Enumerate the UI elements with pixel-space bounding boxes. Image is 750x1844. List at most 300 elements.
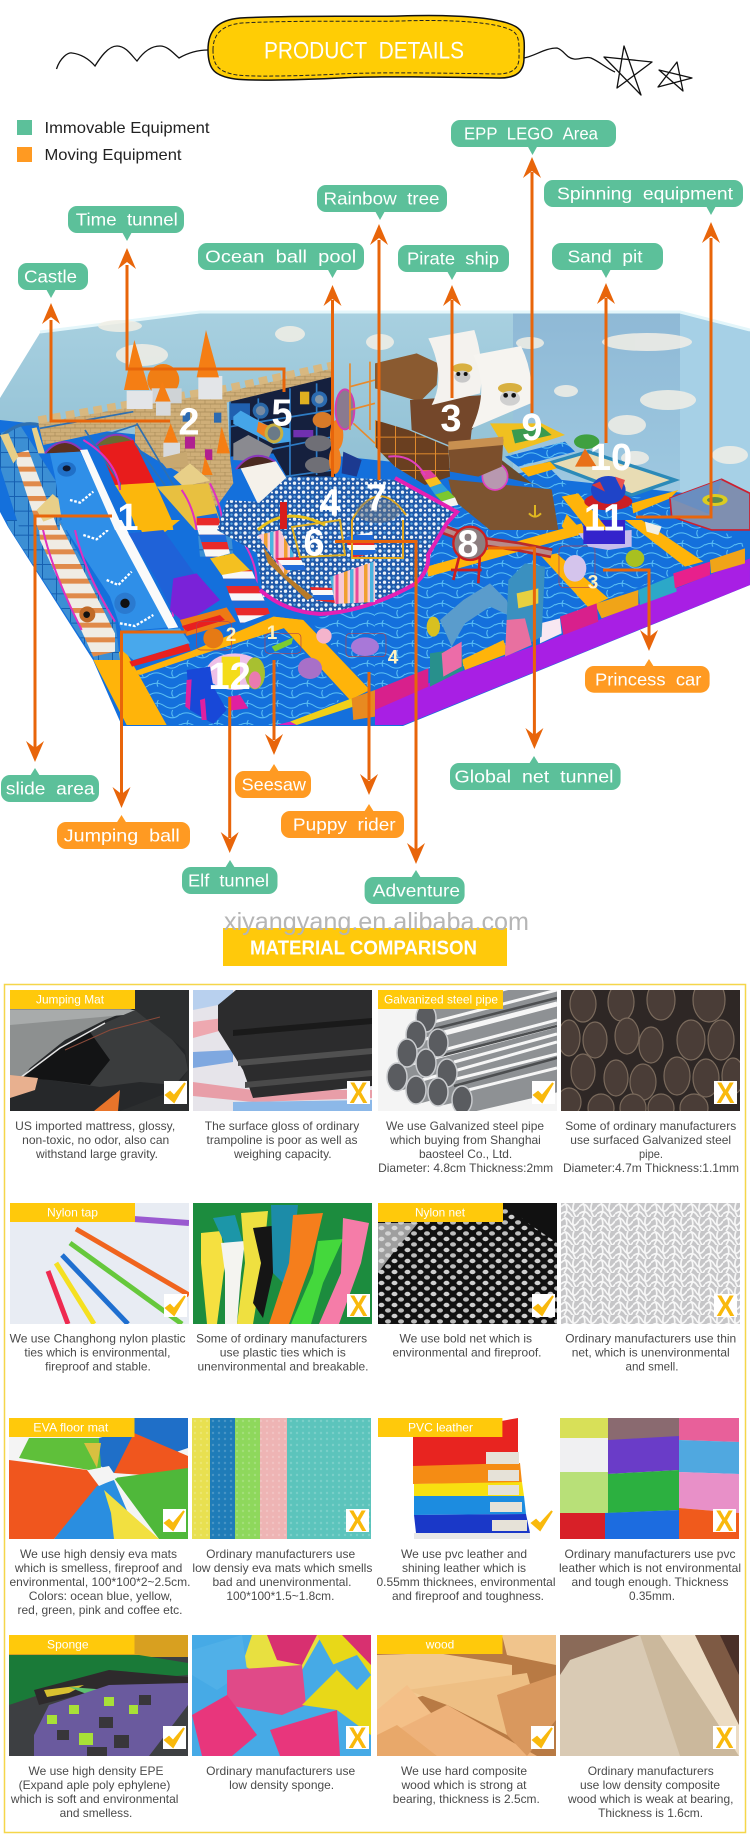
back wall <box>0 312 750 540</box>
magenta rails <box>42 523 257 630</box>
callout: Pirate ship: Pirate ship <box>407 248 499 268</box>
badge: check <box>532 1081 555 1104</box>
pirate ship zone <box>375 330 750 530</box>
pool magenta rim <box>260 478 457 614</box>
puppy riders <box>298 633 386 679</box>
caption: leather which is not environmental <box>559 1561 741 1575</box>
caption: Ordinary manufacturers use pvc <box>564 1547 736 1561</box>
arrow: Elf tunnel <box>221 697 239 853</box>
arrow: Rainbow tree <box>370 224 388 480</box>
legend text immovable: Immovable Equipment <box>44 120 210 137</box>
squiggle left <box>56 46 208 69</box>
cell: EVA mat good <box>9 1418 190 1617</box>
white slide <box>236 456 302 503</box>
arrow: Seesaw <box>265 660 283 755</box>
caption: 0.55mm thicknees, environmental <box>376 1575 556 1589</box>
caption: The surface gloss of ordinary <box>205 1119 359 1133</box>
number 4: 4 <box>319 482 341 524</box>
main slide lower <box>60 520 177 632</box>
caption <box>376 1547 556 1603</box>
caption: unenvironmental and breakable. <box>198 1360 368 1374</box>
callout: Seesaw: Seesaw <box>242 774 306 794</box>
caption: wood which is weak at bearing, <box>567 1792 733 1806</box>
number 7: 7 <box>366 478 387 520</box>
caption: which is soft and environmental <box>10 1792 178 1806</box>
badge: X: X <box>348 1722 366 1755</box>
purple base <box>375 558 750 725</box>
pink ball toy <box>316 628 332 644</box>
arrow: Castle <box>42 303 170 421</box>
coral sign <box>430 563 545 687</box>
caption <box>205 1119 359 1161</box>
caption: wood which is strong at <box>400 1778 527 1792</box>
caption: ties which is environmental, <box>24 1346 170 1360</box>
label <box>378 1203 503 1222</box>
yellow banner shape <box>208 16 524 80</box>
badge: X: X <box>716 1505 734 1538</box>
photo: rusty pipes <box>561 990 740 1111</box>
callout: Ocean ball pool <box>198 243 364 278</box>
caption: low density sponge. <box>229 1778 334 1792</box>
caption <box>563 1119 739 1175</box>
caption: non-toxic, no odor, also can <box>22 1133 169 1147</box>
caption: Some of ordinary manufacturers <box>196 1332 367 1346</box>
orange frame <box>350 362 375 443</box>
callout: Rainbow tree <box>317 185 447 220</box>
seesaw <box>265 633 301 653</box>
lookout net <box>356 499 400 523</box>
callout: Puppy rider: Puppy rider <box>293 814 396 834</box>
label <box>10 990 135 1009</box>
caption <box>196 1332 368 1374</box>
sail one <box>428 330 482 405</box>
castle zone <box>0 330 375 530</box>
caption <box>10 1332 186 1374</box>
ticket booth <box>540 618 562 643</box>
heading text: PRODUCT DETAILS <box>264 38 464 64</box>
photo: black jumping mat <box>10 990 189 1111</box>
callout: slide area <box>1 768 99 802</box>
arrow: EPP LEGO Area <box>523 157 541 413</box>
jumping platform <box>180 607 236 636</box>
label <box>9 1418 134 1437</box>
small number 1: 1 <box>267 623 278 644</box>
cell: sponge ordinary <box>192 1635 371 1792</box>
callout: EPP LEGO Area: EPP LEGO Area <box>464 124 598 144</box>
princess car <box>559 546 595 588</box>
callout: Global net tunnel <box>450 756 621 790</box>
caption <box>10 1764 178 1820</box>
caption: Diameter: 4.8cm Thickness:2mm <box>378 1161 553 1175</box>
caption: environmental, 100*100*2~2.5cm. <box>10 1575 190 1589</box>
slide pattern <box>83 528 153 626</box>
castle wall <box>38 368 333 445</box>
label: Nylon tap <box>47 1206 98 1220</box>
caption: environmental and fireproof. <box>392 1346 542 1360</box>
castle keep <box>135 400 233 507</box>
photo: foam pit park <box>9 1635 188 1756</box>
number 2: 2 <box>178 402 200 444</box>
wall crenellations <box>38 365 333 420</box>
caption: withstand large gravity. <box>35 1147 158 1161</box>
central stairs lower <box>197 520 233 557</box>
floor undercoat <box>0 420 750 726</box>
caption: We use Changhong nylon plastic <box>10 1332 186 1346</box>
photo: ordinary trampoline <box>193 990 372 1111</box>
badge: X: X <box>716 1290 734 1323</box>
caption: fireproof and stable. <box>45 1360 151 1374</box>
label: EVA floor mat <box>33 1420 109 1434</box>
comparison heading: MATERIAL COMPARISON <box>250 936 477 960</box>
barrels <box>305 412 362 477</box>
photo: thin color mats <box>192 1418 371 1539</box>
arrow: Jumping ball <box>112 632 187 808</box>
blue tube <box>233 411 291 444</box>
caption: We use high densiy eva mats <box>20 1547 177 1561</box>
slide base <box>120 628 190 660</box>
callout: Ocean ball pool: Ocean ball pool <box>205 246 356 266</box>
label: Jumping Mat <box>36 992 105 1006</box>
tent slide stripes <box>258 530 300 575</box>
label <box>9 1635 134 1654</box>
label: Sponge <box>47 1638 89 1652</box>
callout: Spinning equipment <box>544 180 743 215</box>
callout: Puppy rider <box>281 804 404 838</box>
number 5: 5 <box>271 392 293 434</box>
badge: check <box>164 1294 187 1317</box>
caption: use surfaced Galvanized steel <box>570 1133 731 1147</box>
arrow: Sand pit <box>597 283 615 443</box>
back pit <box>490 423 575 467</box>
spinning ride <box>584 476 632 510</box>
label: wood <box>425 1638 454 1652</box>
numbers on illustration <box>117 392 632 698</box>
water floor right <box>375 487 750 690</box>
caption: baosteel Co., Ltd. <box>419 1147 512 1161</box>
caption: bearing, thickness is 2.5cm. <box>393 1792 540 1806</box>
red steps tent <box>345 532 376 558</box>
callout: Jumping ball: Jumping ball <box>64 826 180 846</box>
side lattice upper <box>0 425 60 530</box>
caption: red, green, pink and coffee etc. <box>18 1603 182 1617</box>
callout: Time tunnel: Time tunnel <box>76 210 178 230</box>
playground illustration <box>0 312 750 726</box>
squiggle right <box>524 48 615 72</box>
badge: X: X <box>350 1077 368 1110</box>
badge: check <box>532 1511 552 1530</box>
yellow paths right <box>427 477 703 670</box>
climbing rail <box>388 456 425 475</box>
cell: wood ordinary <box>560 1635 739 1820</box>
rainbow slide lower <box>137 520 180 535</box>
title banner <box>56 16 692 95</box>
net cube <box>292 520 345 557</box>
side stairs upper <box>17 450 58 530</box>
wall blue rail <box>40 412 133 428</box>
caption: trampoline is poor as well as <box>206 1133 358 1147</box>
label <box>377 1635 502 1654</box>
pirate skull logos <box>452 363 522 406</box>
photo: pale composite wood <box>560 1635 739 1756</box>
grey mountain <box>233 435 273 462</box>
sand pit <box>548 434 675 495</box>
callout: Sand pit <box>552 243 663 278</box>
caption <box>392 1332 542 1360</box>
caption: Diameter:4.7m Thickness:1.1mm <box>563 1161 739 1175</box>
comparison bar <box>223 928 507 966</box>
side rail <box>3 424 40 435</box>
caption: which is smelless, fireproof and <box>14 1561 182 1575</box>
caption: Ordinary manufacturers use <box>206 1547 356 1561</box>
caption: We use hard composite <box>401 1764 527 1778</box>
photo: foam cubes <box>192 1635 371 1756</box>
caption: and fireproof and toughness. <box>392 1589 544 1603</box>
cell: nylon tie ordinary <box>193 1203 372 1374</box>
caption: 100*100*1.5~1.8cm. <box>226 1589 334 1603</box>
caption <box>559 1547 741 1603</box>
callout: slide area: slide area <box>6 778 95 798</box>
caption: Thickness is 1.6cm. <box>598 1806 703 1820</box>
front steps <box>310 587 335 603</box>
arrow: Time tunnel <box>118 248 284 392</box>
cell: steel pipe good <box>378 976 557 1175</box>
comparison heading bar <box>223 908 529 966</box>
photo: white thin net <box>561 1203 740 1324</box>
hull back <box>502 460 552 488</box>
small number 2: 2 <box>226 625 236 646</box>
callout: Adventure: Adventure <box>373 880 460 900</box>
callout: Adventure <box>365 870 465 904</box>
callout: Sand pit: Sand pit <box>568 246 643 266</box>
label: Galvanized steel pipe <box>384 992 498 1006</box>
rainbow slide upper <box>95 435 173 530</box>
caption: weighing capacity. <box>233 1147 332 1161</box>
photo: PVC swatches <box>413 1418 530 1539</box>
lookout cage <box>352 496 406 558</box>
caption: We use high density EPE <box>28 1764 164 1778</box>
net tunnel <box>418 520 552 583</box>
photo: colored nylon ties <box>10 1203 189 1324</box>
icon: small star <box>658 62 692 91</box>
caption: We use pvc leather and <box>401 1547 527 1561</box>
number 6: 6 <box>303 522 325 564</box>
arrow: Ocean ball pool <box>324 285 342 477</box>
arrow: Pirate ship <box>443 285 461 398</box>
photo: wood planks <box>377 1635 556 1756</box>
callout: Time tunnel <box>68 206 184 241</box>
round window slide <box>482 463 508 490</box>
callout: Princess car <box>585 659 710 693</box>
left foreground floor <box>7 520 386 725</box>
number 11: 11 <box>584 498 624 540</box>
caption: We use bold net which is <box>400 1332 532 1346</box>
caption: Ordinary manufacturers use <box>206 1764 356 1778</box>
colored stairs <box>420 470 458 507</box>
caption: (Expand aple poly ephylene) <box>19 1778 170 1792</box>
slide hole <box>79 593 136 622</box>
jumping ball <box>197 622 232 650</box>
caption <box>378 1119 553 1175</box>
caption: net, which is unenvironmental <box>572 1346 730 1360</box>
caption: which buying from Shanghai <box>389 1133 541 1147</box>
number 12: 12 <box>209 656 251 698</box>
side lattice <box>7 520 120 660</box>
caption <box>567 1764 733 1820</box>
spinning net cage <box>670 479 750 530</box>
cell: EVA mat ordinary <box>192 1418 372 1603</box>
cell: nylon tie good <box>10 1203 189 1374</box>
callout: EPP LEGO Area <box>451 120 616 155</box>
photo: EVA floor mats <box>9 1418 188 1539</box>
cell: PVC ordinary <box>559 1418 741 1603</box>
upper deck <box>375 353 438 402</box>
caption: bad and unenvironmental. <box>212 1575 352 1589</box>
dark cubby structure <box>230 377 335 477</box>
badge: check <box>163 1726 186 1749</box>
callout: Castle <box>18 263 88 298</box>
keep windows <box>183 412 221 460</box>
callout: Elf tunnel <box>182 860 278 894</box>
right foreground floor <box>375 477 750 725</box>
callout: Elf tunnel: Elf tunnel <box>188 870 269 890</box>
caption: and smelless. <box>60 1806 132 1820</box>
badge: check <box>532 1294 555 1317</box>
cell: nylon net ordinary <box>561 1203 740 1374</box>
small number 4: 4 <box>388 648 399 668</box>
legend swatch immovable <box>17 120 32 135</box>
callouts <box>1 120 743 904</box>
callout: Seesaw <box>235 764 311 798</box>
caption <box>565 1332 736 1374</box>
caption: We use Galvanized steel pipe <box>386 1119 544 1133</box>
other toys right <box>427 520 662 637</box>
water strip <box>518 467 575 527</box>
label <box>378 990 503 1009</box>
rainbow arch <box>258 516 325 530</box>
cubby grid <box>230 383 333 477</box>
badge: X: X <box>716 1077 734 1110</box>
red pole <box>280 502 287 529</box>
label <box>10 1203 135 1222</box>
label <box>378 1418 502 1437</box>
leader lines and arrows <box>26 157 720 864</box>
cubby portholes <box>230 391 327 437</box>
caption: pipe. <box>639 1147 663 1161</box>
caption <box>393 1764 540 1806</box>
arrow: Puppy rider <box>360 672 378 795</box>
cell: PVC good <box>376 1418 557 1603</box>
photo: cable tie bundles <box>193 1203 372 1324</box>
arrow: Adventure <box>335 542 425 864</box>
badge: check <box>163 1509 186 1532</box>
elf tunnel <box>185 653 265 724</box>
cell: nylon net good <box>378 1203 557 1360</box>
cell: steel pipe ordinary <box>557 978 744 1175</box>
edge fence strips <box>375 548 745 710</box>
watermark: xiyangyang.en.alibaba.com <box>224 908 529 936</box>
caption <box>206 1764 356 1792</box>
arrow: Princess car <box>603 570 658 651</box>
label: Nylon net <box>415 1206 466 1220</box>
number 10: 10 <box>590 437 632 479</box>
callout: Princess car: Princess car <box>595 670 702 690</box>
main slide upper <box>45 442 124 530</box>
legend text moving: Moving Equipment <box>44 147 182 164</box>
round climbing net <box>336 389 354 429</box>
towers <box>124 330 230 475</box>
legend swatch moving <box>17 147 32 162</box>
photo: black net <box>378 1203 557 1324</box>
badge: check <box>164 1081 187 1104</box>
gold roofs <box>0 427 210 522</box>
small number 3: 3 <box>588 572 598 594</box>
caption: and smell. <box>626 1360 678 1374</box>
number 1: 1 <box>117 497 139 539</box>
stairs mid <box>83 440 223 530</box>
caption <box>15 1119 175 1161</box>
number 8: 8 <box>457 524 479 566</box>
caption: Some of ordinary manufacturers <box>565 1119 736 1133</box>
badge: X: X <box>716 1722 734 1755</box>
stair fences <box>85 423 200 530</box>
callout: Pirate ship <box>398 245 509 280</box>
callout: Jumping ball <box>57 815 190 849</box>
badge: X: X <box>350 1290 368 1323</box>
photo: colored leather patches <box>560 1418 739 1539</box>
icon: big star <box>604 46 652 95</box>
lower cabin <box>448 439 503 477</box>
caption: low densiy eva mats which smells <box>192 1561 372 1575</box>
wall clouds <box>98 320 748 465</box>
number 9: 9 <box>521 407 543 449</box>
stitched outline <box>213 20 519 76</box>
caption: shining leather which is <box>402 1561 526 1575</box>
caption: use plastic ties which is <box>220 1346 346 1360</box>
arrow: slide area <box>26 516 112 762</box>
caption: Ordinary manufacturers use thin <box>565 1332 736 1346</box>
sail two <box>472 346 531 428</box>
cell: wood good <box>377 1635 556 1806</box>
callout: Spinning equipment: Spinning equipment <box>557 184 733 204</box>
cell: jumping mat ordinary <box>193 990 372 1161</box>
side stairs <box>38 520 115 657</box>
badge: X: X <box>348 1505 366 1538</box>
anchor <box>529 505 541 517</box>
callout: Global net tunnel: Global net tunnel <box>454 766 614 786</box>
panel: material comparison <box>4 976 746 1832</box>
legend <box>17 120 210 164</box>
caption: US imported mattress, glossy, <box>15 1119 175 1133</box>
pirate hull <box>448 479 558 530</box>
yellow paths left <box>93 617 370 725</box>
caption: and tough enough. Thickness <box>572 1575 728 1589</box>
ball pool <box>217 477 457 615</box>
photo: galvanized pipes <box>378 990 557 1111</box>
tent steps <box>276 557 306 570</box>
cell: sponge good <box>9 1635 188 1820</box>
badge: check <box>531 1726 554 1749</box>
callout: Rainbow tree: Rainbow tree <box>324 188 440 208</box>
left lattice block <box>375 420 450 485</box>
callout: Castle: Castle <box>24 266 77 286</box>
tent wood base <box>263 547 313 600</box>
caption: Colors: ocean blue, yellow, <box>29 1589 172 1603</box>
caption <box>192 1547 372 1603</box>
arrow: Global net tunnel <box>488 548 543 749</box>
crenellated deck <box>410 395 485 445</box>
rainbow tent <box>330 561 375 604</box>
arrow: Spinning equipment <box>636 222 720 517</box>
